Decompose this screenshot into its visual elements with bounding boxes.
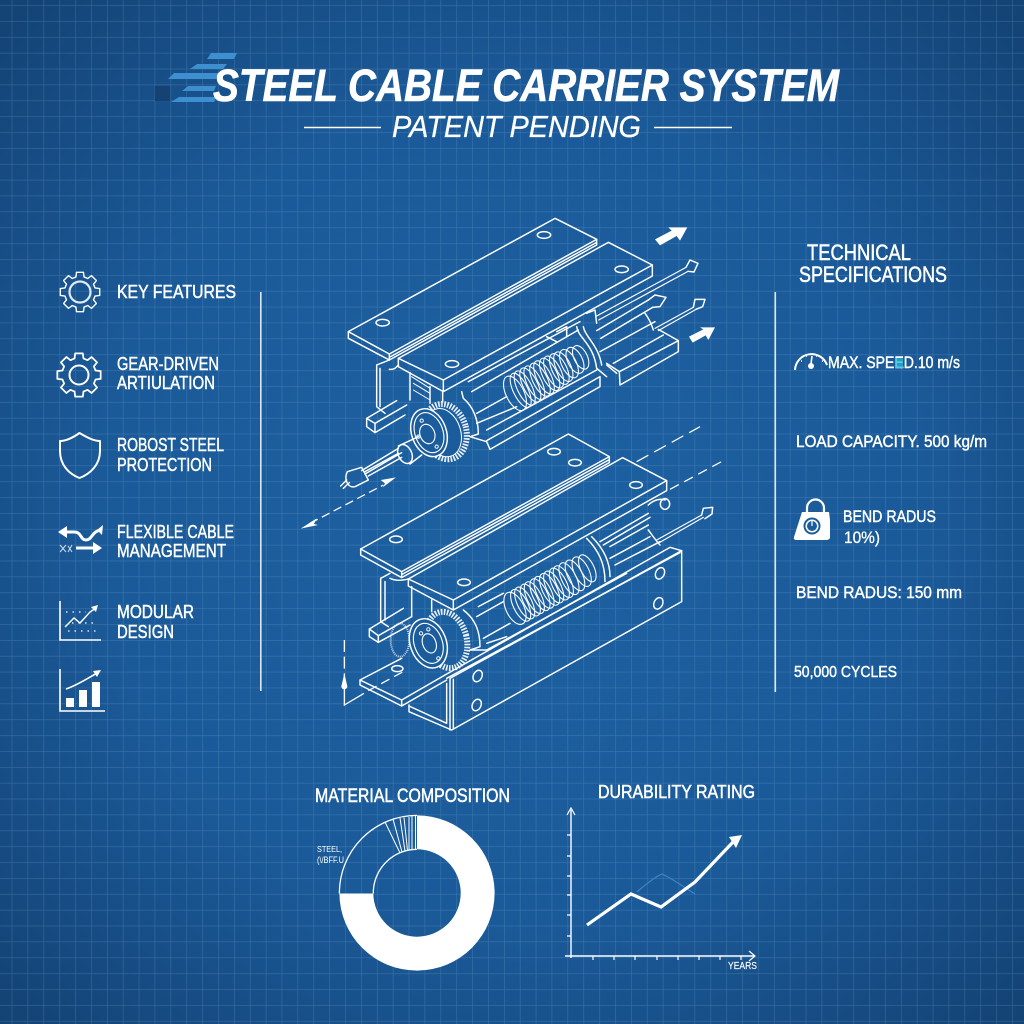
heading: technical specifications: TECHNICAL	[807, 240, 911, 265]
label: robust steel protection: PROTECTION	[117, 455, 212, 475]
icon: gear (key features)	[60, 272, 100, 312]
panel: material composition	[315, 786, 510, 971]
label: flexible cable management: FLEXIBLE CABLE	[117, 522, 234, 542]
icon: bar growth chart	[60, 669, 105, 711]
drive shaft	[362, 437, 422, 474]
drive shaft end	[341, 453, 402, 488]
icon: weight	[794, 500, 830, 540]
label: gear-driven articulation: GEAR-DRIVEN	[117, 354, 219, 374]
top plate 1	[348, 218, 597, 360]
icon: speed gauge	[795, 354, 827, 370]
lead screw	[499, 343, 592, 414]
donut label: STEEL,	[317, 844, 342, 854]
subtitle with rules: PATENT PENDING	[392, 109, 641, 144]
guide rods	[597, 260, 705, 338]
main heading: STEEL CABLE CARRIER SYSTEM	[213, 60, 840, 111]
spec: bend radius note: 10%)	[844, 528, 880, 547]
logo: stacked blue bars	[155, 53, 237, 102]
diagram: lower carrier unit	[301, 427, 723, 730]
label: modular design: MODULAR	[117, 602, 194, 622]
panel: key features	[57, 272, 262, 711]
top plate 1	[361, 434, 609, 578]
artifact: cyan glitch	[895, 358, 903, 368]
top plate 2	[398, 242, 652, 392]
line chart	[565, 808, 755, 961]
arrow: lower right	[689, 327, 715, 343]
left housing	[367, 360, 443, 433]
icon: scatter trend chart	[60, 601, 101, 640]
label: gear-driven articulation: ARTIULATION	[117, 373, 215, 393]
arrow: upper right	[655, 227, 687, 245]
guide rod	[657, 507, 713, 543]
label: gear-driven articulation	[117, 354, 219, 393]
panel: technical specifications	[774, 240, 987, 692]
icon: flexible cable arrows	[58, 525, 103, 554]
label: key features: KEY FEATURES	[117, 282, 236, 302]
label: modular design	[117, 602, 194, 642]
title block	[155, 53, 840, 144]
icon: shield	[60, 433, 100, 478]
label: robust steel protection	[117, 435, 224, 475]
heading: technical specifications: SPECIFICATIONS	[799, 262, 947, 287]
heading: durability rating: DURABILITY RATING	[598, 782, 755, 802]
gear assembly	[391, 607, 473, 673]
lead screw	[499, 552, 600, 628]
panel: durability rating	[565, 782, 757, 972]
lower tray and rails	[462, 310, 678, 449]
divider: right	[774, 292, 776, 692]
divider: left	[260, 292, 262, 691]
spec: bend radius: BEND RADUS: 150 mm	[796, 583, 962, 602]
label: modular design: DESIGN	[117, 622, 174, 642]
label: flexible cable management: MANAGEMENT	[117, 541, 226, 561]
heading: technical specifications	[799, 240, 947, 287]
label: robust steel protection: ROBOST STEEL	[117, 435, 224, 455]
icon: gear (gear-driven)	[57, 353, 101, 397]
donut chart	[339, 815, 495, 971]
gear assembly	[404, 399, 473, 464]
heading: material composition: MATERIAL COMPOSITION	[315, 786, 510, 807]
top plate 2	[408, 458, 667, 610]
channel body	[360, 547, 682, 730]
inner tray	[463, 499, 670, 650]
spec: max speed: MAX. SPEED.10 m/s	[828, 353, 960, 372]
donut label	[317, 844, 344, 865]
spec: bend radius note: BEND RADUS	[843, 507, 936, 526]
spec: load capacity: LOAD CAPACITY. 500 kg/m	[796, 432, 987, 451]
label: flexible cable management	[117, 522, 234, 561]
spec: cycles: 50,000 CYCLES	[794, 664, 897, 681]
left housing	[369, 573, 432, 642]
axis label: years: YEARS	[728, 960, 757, 972]
diagram: upper carrier unit	[348, 218, 715, 474]
donut label: (\/BFF.U	[317, 855, 344, 865]
spec: bend radius note	[843, 507, 936, 547]
dimension lines	[301, 427, 723, 705]
